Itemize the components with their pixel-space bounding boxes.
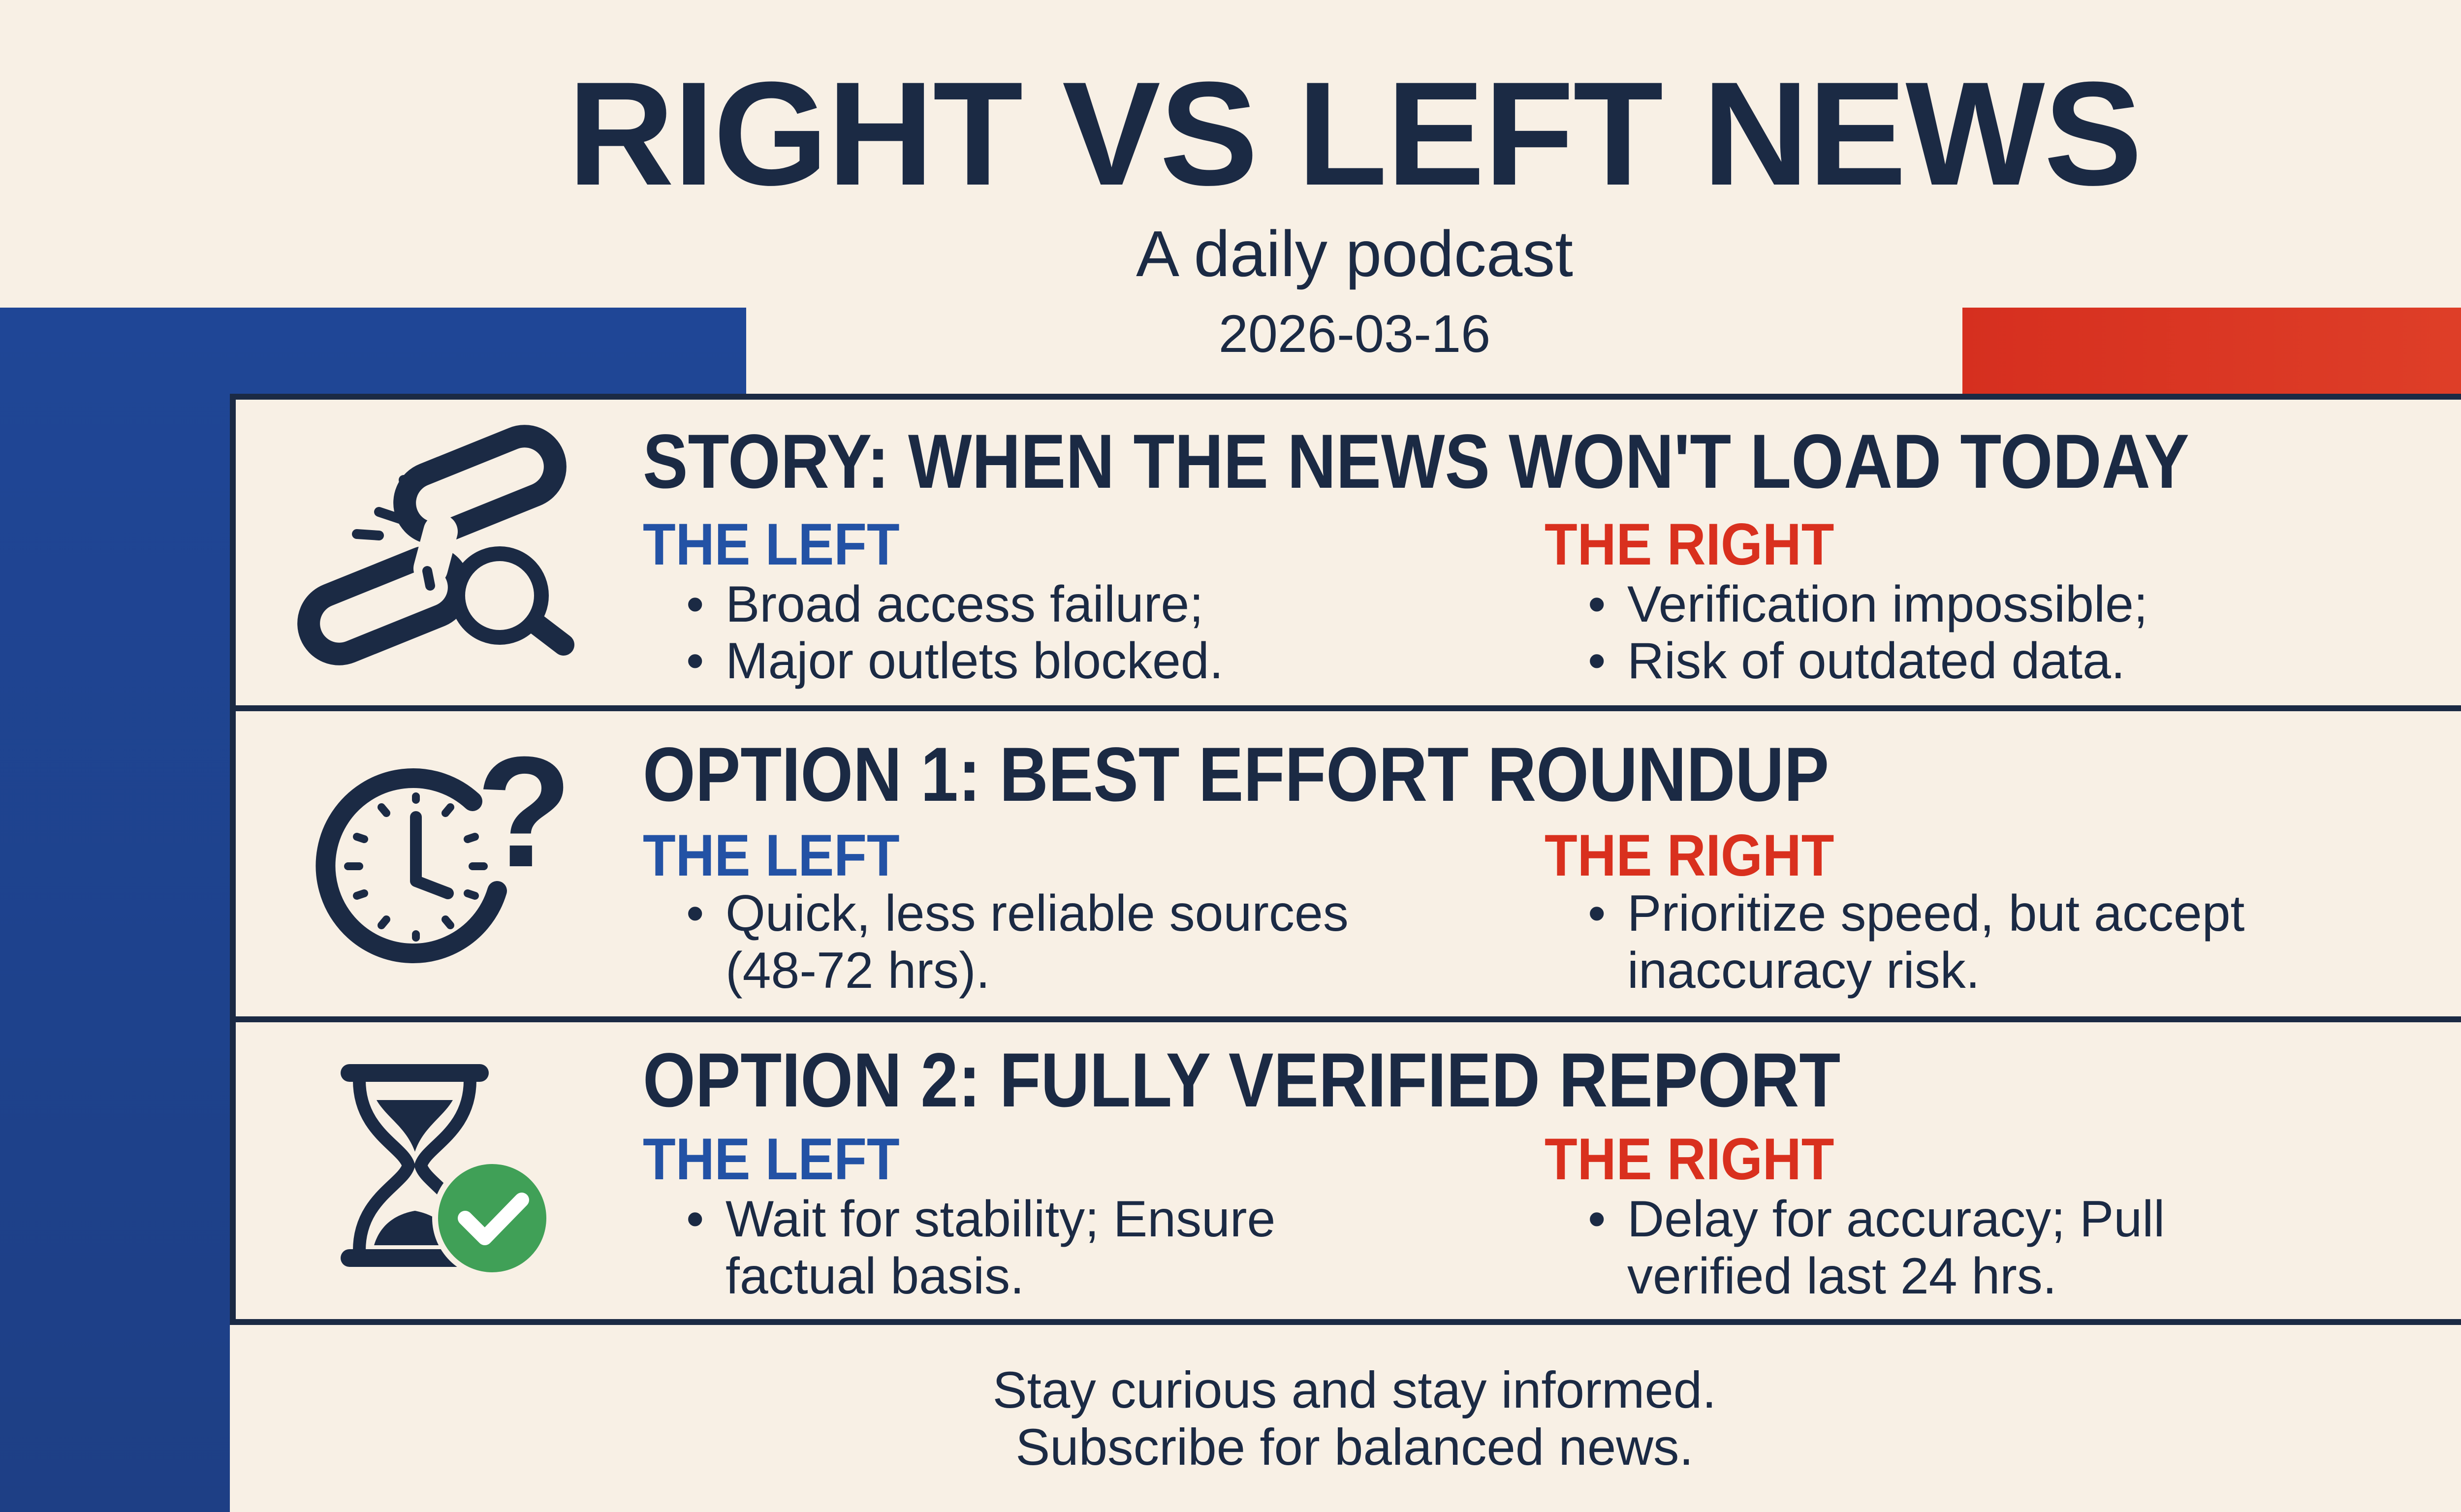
row 2 right label: THE RIGHT — [1545, 822, 1834, 888]
row 3 left bullets — [688, 1191, 1275, 1305]
row 3 right bullets: verified last 24 hrs. — [1627, 1248, 2057, 1305]
subtitle: A daily podcast — [1136, 218, 1573, 290]
footer text: Subscribe for balanced news. — [1015, 1418, 1694, 1476]
text: ? — [476, 724, 572, 900]
blue band — [0, 308, 746, 1512]
icon: broken chain with magnifier — [299, 427, 565, 663]
date: 2026-03-16 — [1219, 304, 1490, 363]
footer text — [993, 1361, 1716, 1476]
red band — [1962, 308, 2461, 1512]
panel box — [230, 394, 2461, 1325]
row 3 right bullets — [1590, 1191, 2165, 1305]
row 3 left bullets: factual basis. — [726, 1248, 1024, 1305]
title: RIGHT VS LEFT NEWS — [568, 51, 2142, 216]
row 2 left bullets: Quick, less reliable sources — [726, 885, 1349, 942]
row 1 heading: STORY: WHEN THE NEWS WON'T LOAD TODAY — [643, 419, 2189, 504]
row 2 right bullets — [1590, 885, 2244, 999]
row 2 right bullets: Prioritize speed, but accept — [1627, 885, 2244, 942]
row 1 right bullets: Risk of outdated data. — [1627, 632, 2125, 690]
row 1 left bullets: Broad access failure; — [726, 576, 1203, 633]
footer text: Stay curious and stay informed. — [993, 1361, 1716, 1419]
row 2 right bullets: inaccuracy risk. — [1627, 942, 1980, 999]
row 3 right label: THE RIGHT — [1545, 1126, 1834, 1192]
row 3 heading: OPTION 2: FULLY VERIFIED REPORT — [643, 1038, 1840, 1123]
row 3 left label: THE LEFT — [643, 1126, 900, 1192]
row 3 left bullets: Wait for stability; Ensure — [726, 1191, 1275, 1248]
row 2 left label: THE LEFT — [643, 822, 900, 888]
icon: clock with question mark — [325, 778, 497, 953]
row 1 right label: THE RIGHT — [1545, 511, 1834, 577]
row 3 right bullets: Delay for accuracy; Pull — [1627, 1191, 2165, 1248]
row 2 heading: OPTION 1: BEST EFFORT ROUNDUP — [643, 732, 1829, 818]
row 2 left bullets: (48-72 hrs). — [726, 942, 990, 999]
row 1 right bullets: Verification impossible; — [1627, 576, 2148, 633]
row 1 right bullets — [1590, 576, 2148, 690]
row 1 left bullets — [688, 576, 1224, 690]
row 1 left label: THE LEFT — [643, 511, 900, 577]
icon: hourglass with check — [349, 1073, 552, 1278]
row 1 left bullets: Major outlets blocked. — [726, 632, 1224, 690]
cream content area — [230, 394, 2461, 1512]
row 2 left bullets — [688, 885, 1349, 999]
